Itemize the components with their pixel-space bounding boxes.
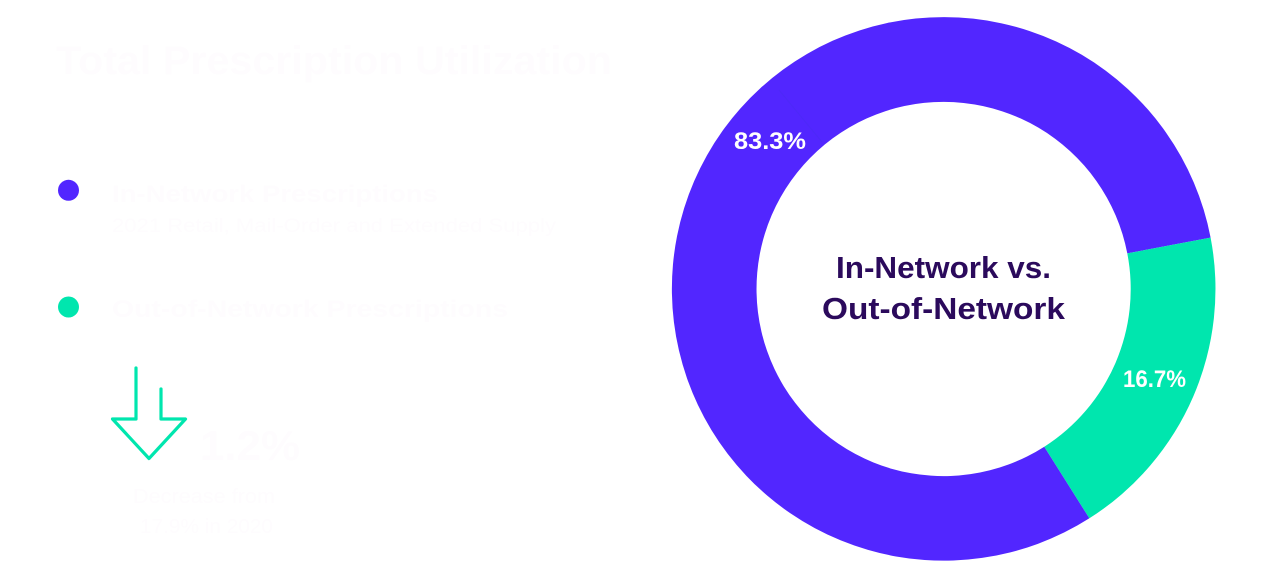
legend: in-network xyxy=(58,180,557,237)
callout figure: 1.2% xyxy=(200,422,300,469)
callout: decrease xyxy=(112,368,300,538)
out-of-network value: 16.7% xyxy=(1123,366,1186,393)
in-network description: 2021 Retail, Mail-Order and Extended Supply xyxy=(112,216,557,237)
icon: down arrow xyxy=(112,368,186,458)
donut chart xyxy=(672,17,1215,561)
legend: out-of-network xyxy=(58,296,508,323)
callout comparison: 17.9% in 2020 xyxy=(140,516,273,538)
icon: in-network dot xyxy=(58,180,79,201)
in-network value: 83.3% xyxy=(734,128,806,155)
in-network label: In-Network Prescriptions xyxy=(112,181,438,208)
donut center label: Out-of-Network xyxy=(822,291,1066,326)
donut center label xyxy=(822,250,1066,326)
callout text: Decrease from xyxy=(133,486,275,508)
out-of-network label: Out-of-Network Prescriptions xyxy=(112,296,508,323)
out-of-network segment xyxy=(1044,238,1215,518)
in-network segment xyxy=(672,17,1211,561)
icon: out-of-network dot xyxy=(58,296,79,318)
donut center label: In-Network vs. xyxy=(836,250,1051,285)
title: Total Prescription Utilization xyxy=(56,39,612,83)
